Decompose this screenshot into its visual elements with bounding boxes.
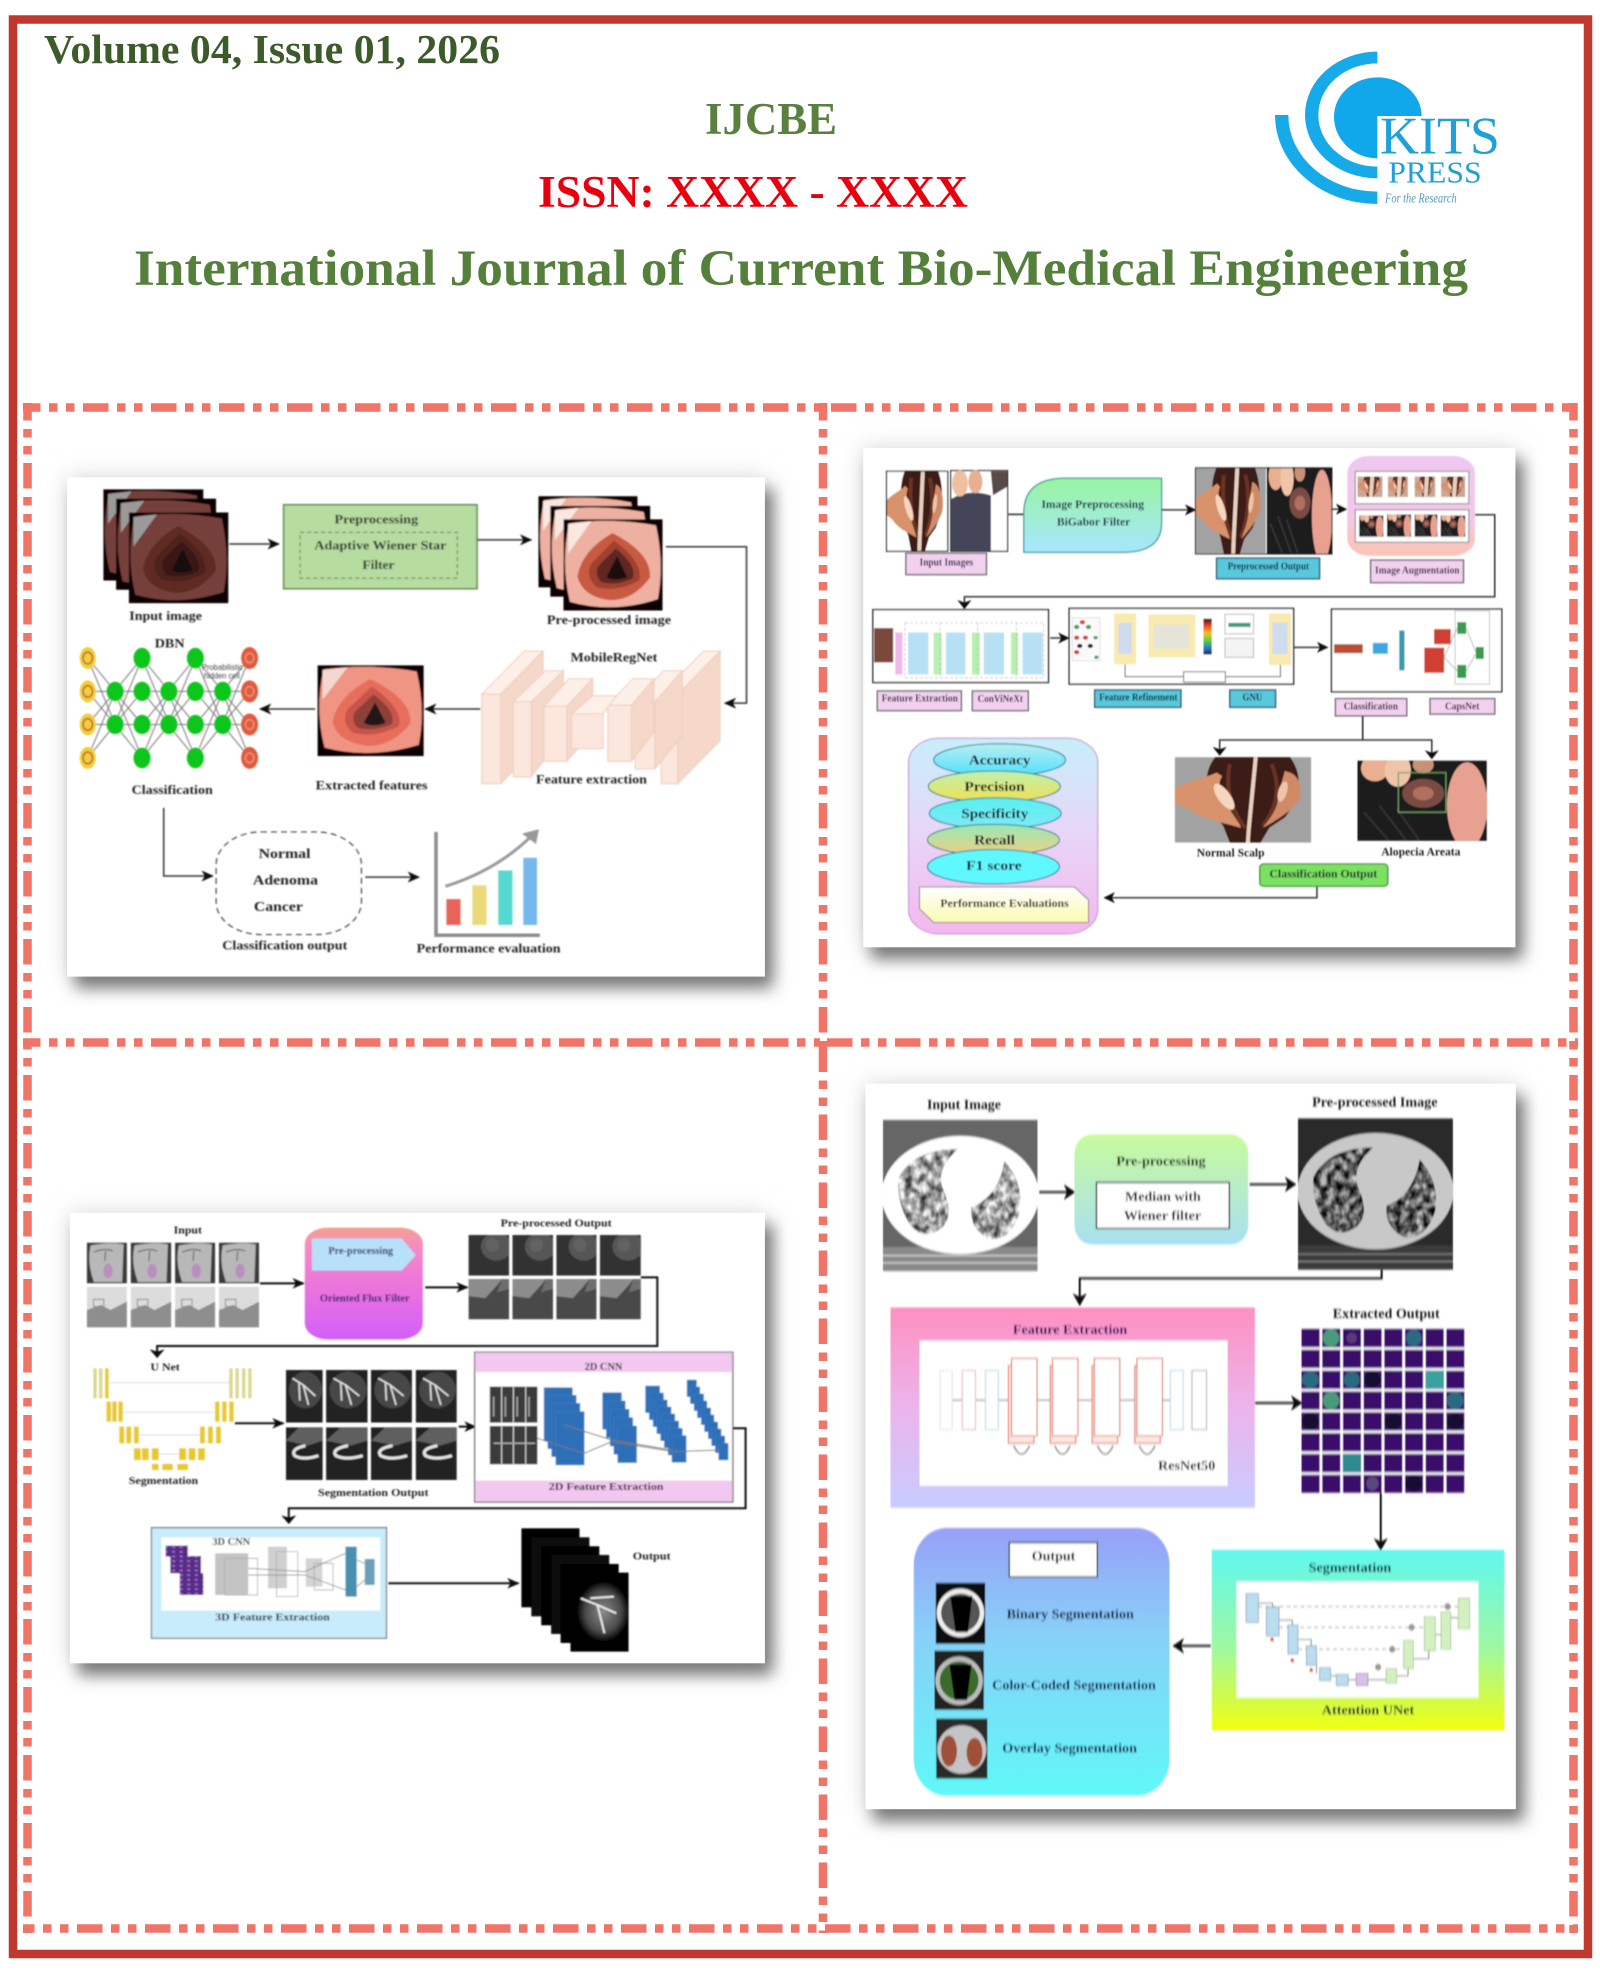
arrow: [1039, 1191, 1074, 1193]
input images: [887, 470, 1008, 551]
pre-processing box: Pre-processing: [1116, 1153, 1206, 1169]
arrow: [666, 547, 747, 703]
panel: colonoscopy pipeline: [67, 477, 765, 977]
label: input: Input: [174, 1224, 202, 1236]
logo: KITS Press: [1275, 52, 1500, 205]
DBN network: [80, 647, 258, 769]
label: performance evaluation: Performance evaluation: [417, 942, 561, 956]
panel: angiography pipeline: [70, 1213, 765, 1663]
arrow: [425, 1286, 468, 1288]
output box: Output: [1032, 1548, 1076, 1564]
input CT image: [882, 1120, 1039, 1271]
label: GNU: GNU: [1243, 691, 1263, 703]
output box: Binary Segmentation: [1007, 1606, 1135, 1622]
label: probabilistic hidden cell: Probabilistic: [202, 663, 243, 673]
preprocessing box: Preprocessing: [335, 513, 418, 527]
classification output box: Classification Output: [1269, 868, 1378, 880]
performance evaluations: Precision: [964, 780, 1025, 794]
arrow: [164, 808, 213, 876]
label: MobileRegNet: MobileRegNet: [571, 651, 657, 665]
label: feature extraction: Feature extraction: [536, 773, 647, 787]
label: ConViNeXt: ConViNeXt: [978, 692, 1023, 705]
label: ConViNeXt: [972, 691, 1028, 711]
3D CNN box: 3D CNN: [212, 1536, 250, 1547]
classification output group: [216, 832, 361, 935]
label: DBN: DBN: [155, 637, 185, 651]
output box: [914, 1528, 1170, 1796]
arrow: [477, 539, 531, 541]
CapsNet diagram: [1331, 609, 1502, 692]
input image stack: [103, 489, 228, 603]
arrow: [289, 1428, 746, 1523]
segmentation images: [286, 1370, 457, 1480]
pre-processing box: Oriented Flux Filter: [320, 1292, 410, 1304]
performance evaluations: Specificity: [961, 807, 1028, 822]
performance evaluations: Recall: [974, 833, 1016, 848]
image augmentation: [1347, 456, 1475, 556]
classification output group: Normal: [259, 845, 311, 861]
pre-processing box: Pre-processing: [328, 1244, 393, 1256]
label: image augmentation: [1371, 560, 1463, 583]
output box: Color-Coded Segmentation: [992, 1677, 1157, 1693]
preprocessing box: Filter: [362, 558, 395, 573]
journal abbreviation: IJCBE: [705, 94, 837, 144]
preprocessing box: Adaptive Wiener Star: [314, 539, 446, 553]
label: classification: Classification: [132, 783, 213, 797]
pre-processed CT image: [1298, 1118, 1453, 1270]
performance evaluations: Performance Evaluations: [940, 897, 1069, 910]
image preprocessing box: BiGabor Filter: [1057, 516, 1131, 528]
extracted features image: [318, 665, 424, 756]
arrow: [388, 1582, 519, 1584]
label: probabilistic hidden cell: [202, 663, 243, 681]
arrow: [235, 1422, 284, 1424]
feature map grid: [1302, 1329, 1465, 1493]
performance evaluations: [909, 738, 1098, 934]
arrow: [229, 543, 279, 545]
label: output: Output: [633, 1550, 671, 1562]
label: input images: Input Images: [920, 556, 974, 568]
feature extraction box: ResNet50: [1158, 1457, 1215, 1473]
segmentation box: [1212, 1550, 1504, 1730]
panel: alopecia pipeline: [863, 448, 1515, 947]
label: input image: Input image: [129, 609, 202, 623]
image preprocessing box: [1024, 478, 1162, 552]
2D CNN box: [475, 1352, 733, 1502]
ISSN: ISSN: XXXX - XXXX: [538, 167, 968, 217]
label: pre-processed image: Pre-processed Image: [1312, 1094, 1438, 1109]
pre-processed stack: [538, 496, 663, 611]
arrow: [964, 515, 1495, 608]
volume line: Volume 04, Issue 01, 2026: [44, 26, 500, 72]
label: U Net: U Net: [151, 1361, 180, 1373]
label: pre-processed output: Pre-processed Output: [501, 1217, 612, 1229]
feature extraction box: [890, 1308, 1255, 1508]
arrow: [157, 1277, 657, 1357]
logo: KITS Press: KITS: [1380, 105, 1500, 165]
normal scalp image: [1175, 757, 1311, 843]
arrow: [425, 708, 480, 710]
image preprocessing box: Image Preprocessing: [1041, 498, 1145, 510]
performance evaluations: F1 score: [966, 859, 1022, 874]
alopecia image: [1357, 754, 1487, 848]
pre-processing box: Median with: [1125, 1188, 1202, 1204]
label: preprocessed output: Preprocessed Output: [1228, 560, 1309, 572]
label: extracted output: Extracted Output: [1333, 1306, 1440, 1321]
label: image augmentation: Image Augmentation: [1375, 564, 1460, 576]
3D CNN box: 3D Feature Extraction: [215, 1611, 330, 1623]
segmentation box: Attention UNet: [1322, 1702, 1415, 1718]
label: CapsNet: [1430, 699, 1495, 714]
label: feature extraction: [877, 691, 961, 711]
arrow: [1104, 886, 1317, 898]
split arrows: [1220, 716, 1432, 759]
arrow: [1008, 513, 1024, 515]
logo: KITS Press: PRESS: [1388, 156, 1482, 190]
2D CNN box: 2D Feature Extraction: [549, 1480, 664, 1492]
output image stack: [521, 1528, 629, 1652]
arrow: [1332, 508, 1346, 510]
label: classification: Classification: [1344, 700, 1398, 712]
output box: Overlay Segmentation: [1002, 1740, 1138, 1756]
label: feature extraction: Feature Extraction: [882, 692, 958, 704]
arrow: [1294, 646, 1328, 648]
label: input image: Input Image: [927, 1096, 1001, 1112]
pre-processed images: [469, 1233, 643, 1319]
arrow: [1080, 1270, 1382, 1305]
label: classification: [1335, 699, 1407, 716]
arrow: [1255, 1402, 1302, 1404]
3D CNN box: [151, 1528, 386, 1638]
classification output group: Cancer: [254, 899, 303, 914]
input images: [87, 1243, 259, 1327]
arrow: [1380, 1493, 1382, 1550]
journal title: International Journal of Current Bio-Medical Engineering: [134, 241, 1468, 297]
pre-processing box: Wiener filter: [1124, 1208, 1201, 1223]
performance evaluations: Accuracy: [969, 753, 1031, 768]
U-Net diagram: [93, 1368, 252, 1470]
ConViNeXt diagram: [873, 610, 1048, 682]
panel: lung CT pipeline: [865, 1084, 1516, 1809]
label: GNU: [1230, 690, 1276, 707]
label: CapsNet: CapsNet: [1445, 700, 1479, 712]
classification output group: Adenoma: [253, 872, 319, 888]
segmentation box: Segmentation: [1309, 1560, 1392, 1575]
label: feature refinement: Feature Refinement: [1099, 691, 1177, 703]
panel shadows: [67, 448, 1524, 1821]
arrow: [365, 876, 419, 878]
bar chart: performance: [436, 829, 540, 935]
label: pre-processed image: Pre-processed image: [547, 613, 671, 627]
dashed grid frame: [23, 403, 1578, 1933]
pre-processing box: [305, 1228, 423, 1339]
label: feature refinement: [1095, 690, 1181, 707]
label: segmentation: Segmentation: [129, 1474, 199, 1486]
label: preprocessed output: [1217, 558, 1320, 579]
arrow: [459, 1426, 476, 1428]
pre-processing box: [1074, 1134, 1248, 1244]
feature extraction box: Feature Extraction: [1013, 1322, 1128, 1337]
preprocessed images: [1195, 460, 1332, 562]
arrow: [1250, 1183, 1295, 1185]
label: input images: [906, 553, 986, 575]
label: segmentation output: Segmentation Output: [318, 1486, 429, 1498]
label: alopecia areata: Alopecia Areata: [1381, 846, 1461, 858]
label: probabilistic hidden cell: hidden cell: [204, 672, 240, 681]
arrow: [260, 708, 315, 710]
arrow: [1050, 637, 1069, 639]
GNU diagram: [1069, 608, 1294, 684]
feature extraction blocks: [482, 651, 720, 784]
2D CNN box: 2D CNN: [585, 1361, 623, 1372]
arrow: [1162, 509, 1195, 511]
arrow: [260, 1282, 304, 1284]
arrow: [1173, 1645, 1211, 1647]
label: extracted features: Extracted features: [316, 779, 428, 793]
classification output box: [1260, 864, 1388, 886]
label: normal scalp: Normal Scalp: [1197, 847, 1265, 859]
logo: KITS Press: For the Research: [1384, 190, 1457, 205]
preprocessing box: [284, 505, 477, 589]
label: classification output: Classification output: [222, 939, 348, 953]
